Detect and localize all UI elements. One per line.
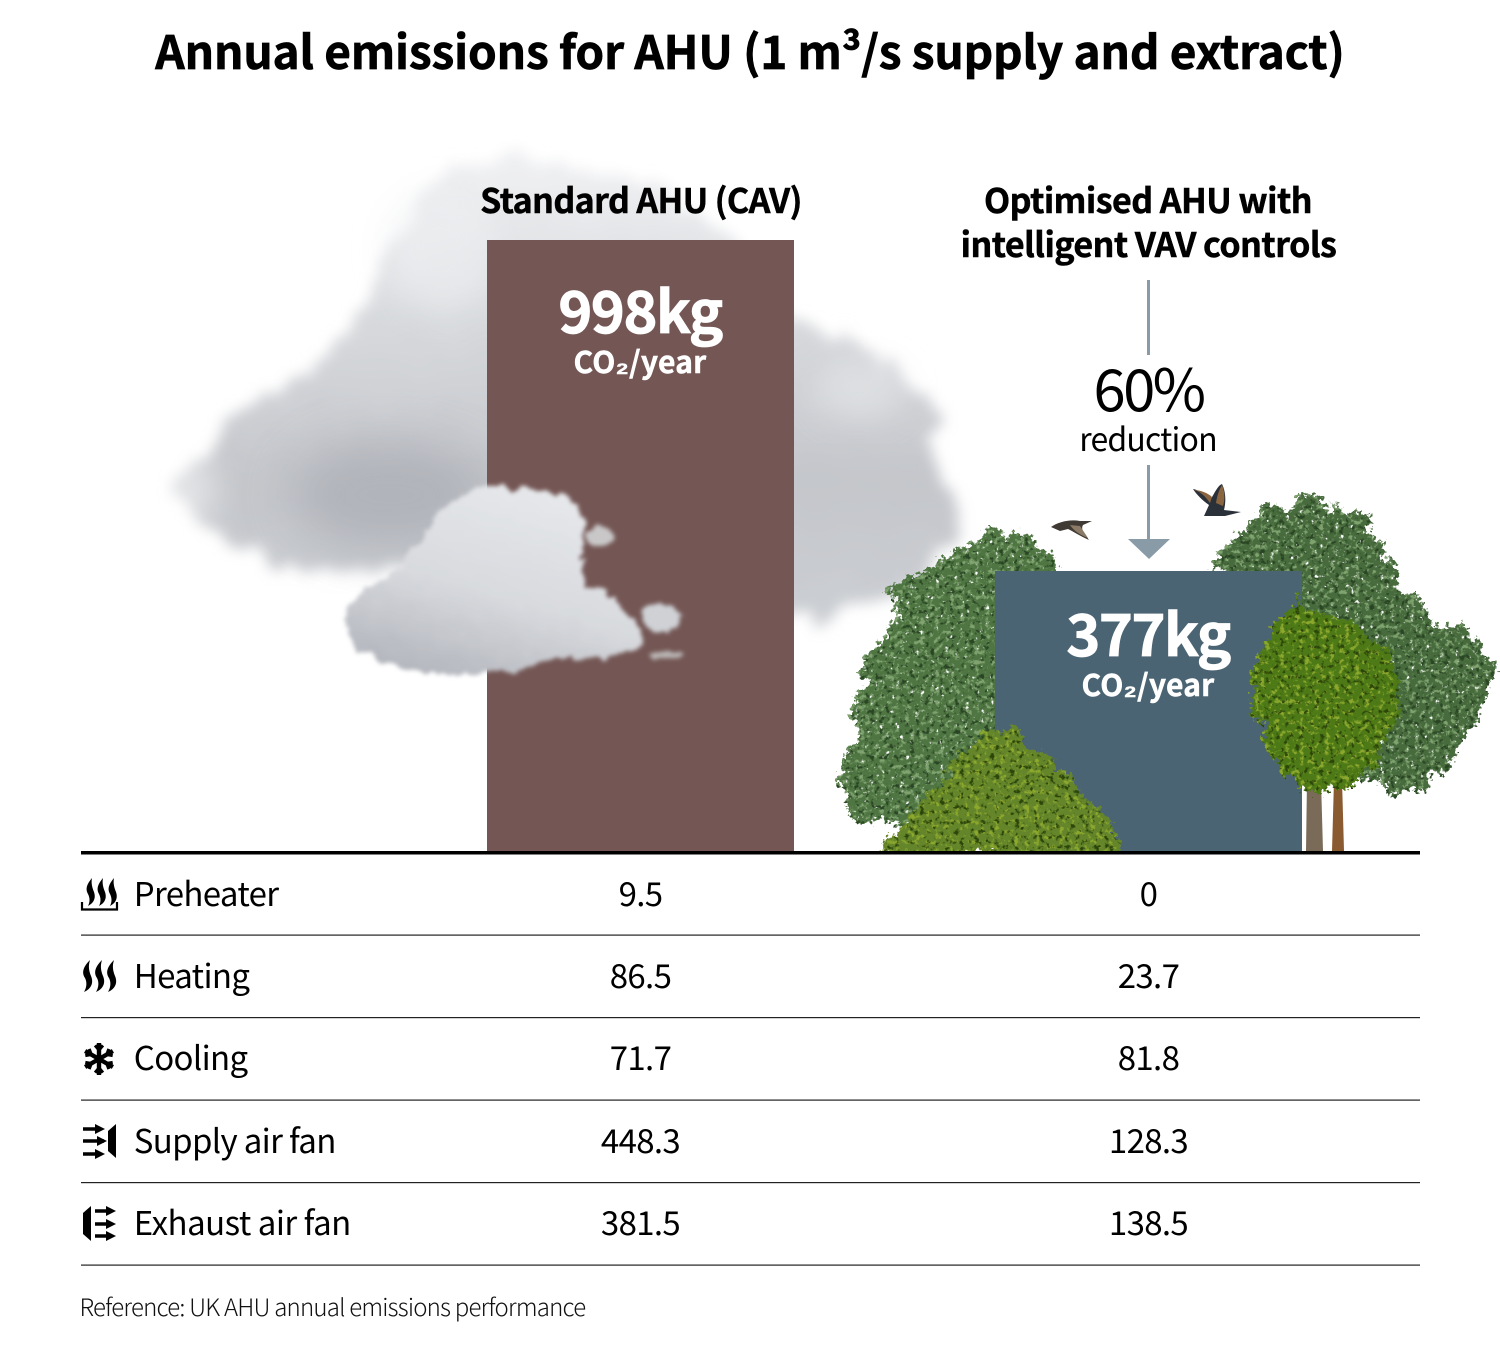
- table row: preheater: Preheater: [134, 868, 279, 916]
- standard AHU value: CO₂/year: [574, 338, 707, 382]
- table row: supply air fan: [83, 1115, 1188, 1163]
- table row: preheater: [82, 868, 1157, 916]
- optimised AHU value: 377kg: [1066, 589, 1231, 673]
- table row: heating: 86.5: [610, 950, 671, 998]
- bird left: [1051, 520, 1092, 540]
- optimised AHU heading: [961, 174, 1336, 267]
- optimised AHU heading: intelligent VAV controls: [961, 218, 1336, 267]
- reduction arrow: [1128, 280, 1170, 559]
- bird right: [1193, 484, 1241, 516]
- icon: exhaust fan: [83, 1206, 116, 1241]
- trees behind bar: [838, 496, 1494, 832]
- table row: exhaust air fan: 138.5: [1109, 1197, 1188, 1245]
- reduction callout: 60%: [1094, 344, 1205, 428]
- table row: cooling: Cooling: [134, 1032, 248, 1080]
- reduction callout: reduction: [1079, 415, 1217, 461]
- front cloud: [345, 486, 685, 674]
- table row: heating: 23.7: [1118, 950, 1179, 998]
- table row: exhaust air fan: 381.5: [601, 1197, 680, 1245]
- icon: heating: [83, 960, 116, 992]
- table row: heating: [83, 950, 1179, 998]
- table row: cooling: 81.8: [1118, 1032, 1179, 1080]
- optimised AHU heading: Optimised AHU with: [984, 174, 1312, 223]
- title: Annual emissions for AHU (1 m³/s supply and extract): [154, 17, 1345, 83]
- standard AHU heading: Standard AHU (CAV): [480, 174, 802, 223]
- table row: supply air fan: 128.3: [1109, 1115, 1188, 1163]
- table row: supply air fan: Supply air fan: [134, 1115, 336, 1163]
- back cloud: [155, 158, 955, 616]
- standard AHU bar: [487, 240, 794, 851]
- table row: heating: Heating: [134, 950, 250, 998]
- table row: supply air fan: 448.3: [601, 1115, 680, 1163]
- icon: supply fan: [83, 1124, 116, 1159]
- table row: preheater: 9.5: [619, 868, 662, 916]
- icon: cooling: [85, 1043, 113, 1075]
- reference note: Reference: UK AHU annual emissions performance: [80, 1288, 585, 1323]
- optimised AHU value: CO₂/year: [1082, 661, 1215, 705]
- table row: exhaust air fan: Exhaust air fan: [134, 1197, 351, 1245]
- ground line: [81, 851, 1420, 854]
- table row: exhaust air fan: [83, 1197, 1188, 1245]
- standard AHU value: 998kg: [558, 266, 723, 350]
- table row: cooling: [85, 1032, 1179, 1080]
- reduction callout: [1079, 344, 1217, 461]
- optimised AHU bar: [995, 571, 1302, 851]
- icon: preheater: [82, 878, 117, 910]
- table row: preheater: 0: [1140, 868, 1157, 916]
- trees in front of bar: [882, 598, 1399, 856]
- table row: cooling: 71.7: [610, 1032, 671, 1080]
